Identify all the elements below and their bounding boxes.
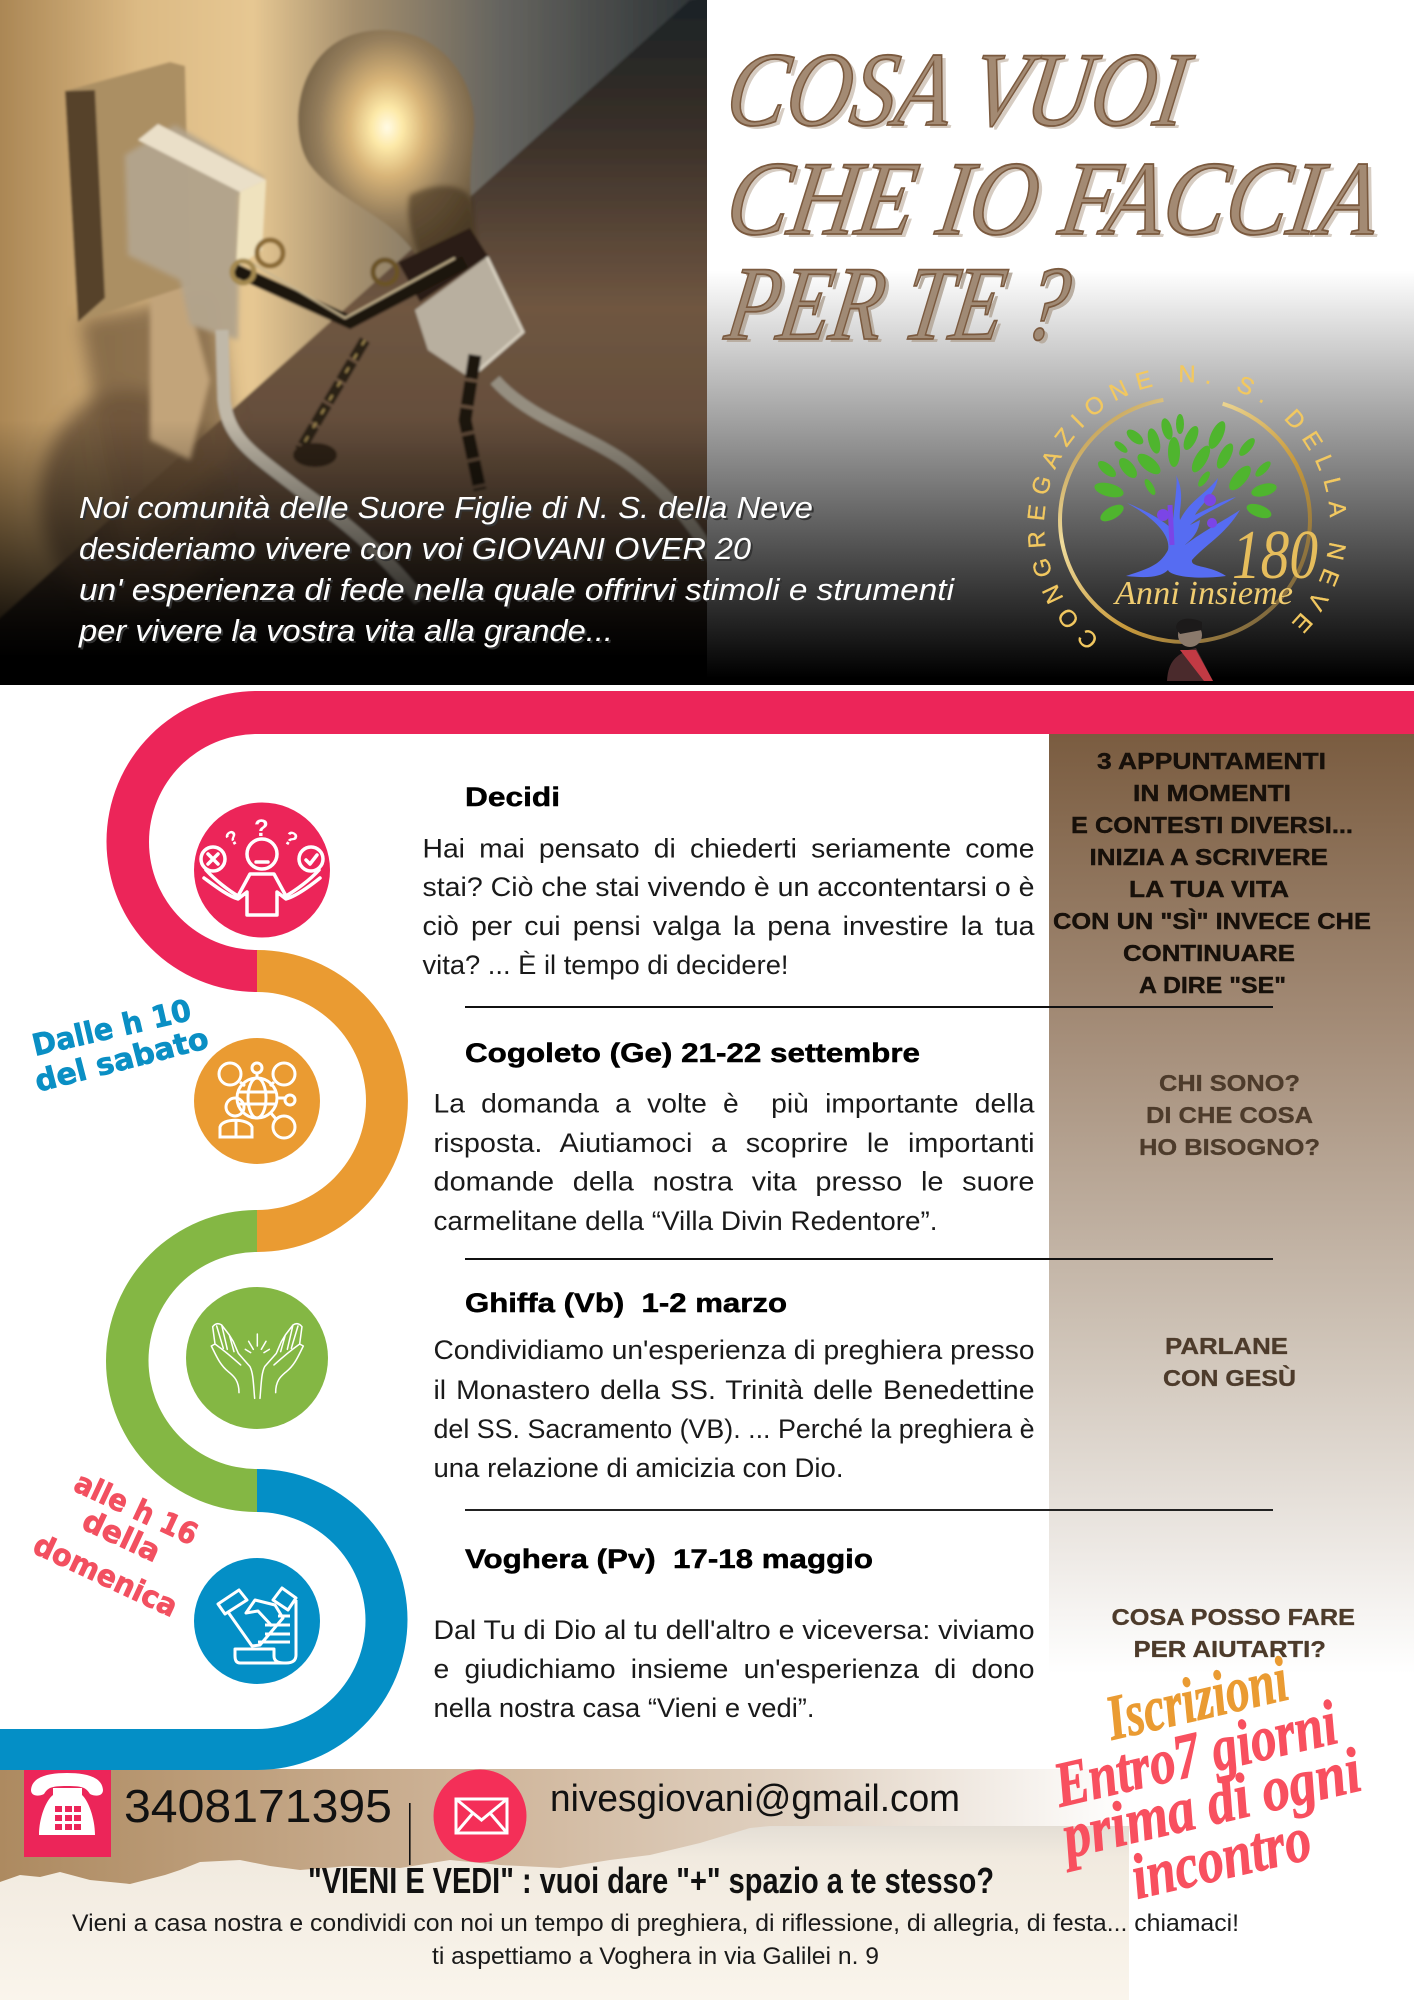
label: alle h 16 della domenica: domenica: [28, 1528, 183, 1625]
contact: email icon: [434, 1770, 526, 1862]
intro text: per vivere la vostra vita alla grande...: [78, 613, 613, 648]
column text: chi sono: [1139, 1070, 1320, 1160]
title: Cosa vuoi che io faccia per te: COSA VUOI: [719, 32, 1200, 149]
column text: cosa posso fare: PER AIUTARTI?: [1134, 1636, 1326, 1662]
intro text: Noi comunità delle Suore Figlie di N. S. della Neve: [79, 490, 813, 525]
body text: ghiffa: [434, 1335, 1034, 1483]
icon: praying hands: [186, 1287, 328, 1429]
column text: chi sono: HO BISOGNO?: [1139, 1134, 1320, 1160]
title: Cosa vuoi che io faccia per te: PER TE ?: [722, 249, 1082, 366]
title: Cosa vuoi che io faccia per te: [718, 32, 1393, 366]
callout: iscrizioni: [1046, 1643, 1368, 1913]
body text: cogoleto: [434, 1088, 1036, 1236]
body text: cogoleto: risposta. Aiutiamoci a scoprire le importanti: [434, 1128, 1034, 1158]
column callout: 3 appuntamenti: [1053, 748, 1371, 998]
body text: decidi: vita? ... È il tempo di decidere!: [422, 950, 788, 980]
logo tree: [1093, 414, 1278, 578]
column text: parlane con gesu: CON GESÙ: [1163, 1364, 1296, 1391]
torn paper background: [0, 1826, 1129, 2000]
bottom band gradient: [0, 1769, 1130, 1889]
column callout: 3 appuntamenti: CONTINUARE: [1123, 940, 1295, 966]
heading: vieni e vedi: "VIENI E VEDI" : vuoi dare "+" spazio a te stesso?: [308, 1860, 994, 1901]
intro text: un' esperienza di fede nella quale offrirvi stimoli e strumenti: [79, 572, 955, 607]
body text: voghera: [434, 1615, 1034, 1723]
title: Cosa vuoi che io faccia per te: PER TE ?: [718, 246, 1078, 363]
entro 7 giorni: Entro7 giorni: [1046, 1687, 1344, 1821]
column callout: 3 appuntamenti: A DIRE "SE": [1139, 972, 1286, 998]
label: dalle h 10 del sabato: del sabato: [31, 1021, 212, 1100]
logo anni insieme: Anni insieme: [1113, 575, 1293, 612]
intro text: per vivere la vostra vita alla grande...: [80, 615, 615, 650]
label: alle h 16 della domenica: [28, 1466, 203, 1625]
section: cogoleto: [434, 1038, 1036, 1236]
column callout: 3 appuntamenti: INIZIA A SCRIVERE: [1090, 844, 1328, 870]
footer invitation text: ti aspettiamo a Voghera in via Galilei n. 9: [432, 1943, 879, 1970]
serpentine orange segment: [257, 950, 408, 1252]
body text: decidi: stai? Ciò che stai vivendo è un accontentarsi o è: [422, 872, 1034, 902]
header right gradient panel: [707, 0, 1414, 685]
column callout: 3 appuntamenti: LA TUA VITA: [1129, 876, 1289, 902]
body text: decidi: [422, 834, 1036, 980]
column text: cosa posso fare: [1112, 1604, 1355, 1662]
column callout: 3 appuntamenti: E CONTESTI DIVERSI...: [1071, 812, 1353, 838]
body text: cogoleto: La domanda a volte è più importante della: [434, 1088, 1036, 1118]
logo founder portrait: [1167, 619, 1213, 681]
body text: voghera: Dal Tu di Dio al tu dell'altro e viceversa: viviamo: [434, 1615, 1034, 1645]
footer invitation text: Vieni a casa nostra e condividi con noi un tempo di preghiera, di riflessione, di allegria, di festa... chiamaci!: [72, 1910, 1239, 1937]
section: voghera: [434, 1544, 1034, 1723]
hero photo: light bulb robot plugging into socket: [0, 0, 720, 690]
heading: decidi: Decidi: [465, 782, 560, 812]
serpentine blue segment: [0, 1469, 408, 1770]
prima di ogni: prima di ogni: [1051, 1734, 1368, 1873]
logo: congregation 180 years: [1027, 365, 1346, 681]
body text: ghiffa: una relazione di amicizia con Dio.: [434, 1453, 844, 1483]
incontro: incontro: [1124, 1803, 1317, 1913]
iscrizioni word: Iscrizioni: [1098, 1643, 1295, 1754]
heading: cogoleto: Cogoleto (Ge) 21-22 settembre: [465, 1038, 920, 1068]
icon: person deciding: ?: [254, 815, 269, 842]
contact: phone icon: [24, 1770, 111, 1857]
divider 1: [465, 1006, 1273, 1008]
intro text: Noi comunità delle Suore Figlie di N. S. della Neve: [81, 492, 815, 527]
body text: ghiffa: il Monastero della SS. Trinità delle Benedettine: [434, 1375, 1034, 1405]
divider 3: [465, 1509, 1273, 1511]
body text: cogoleto: carmelitane della “Villa Divin Redentore”.: [434, 1206, 938, 1236]
right side gradient column: [1049, 734, 1414, 1674]
section: ghiffa: [434, 1288, 1034, 1483]
body text: decidi: Hai mai pensato di chiederti seriamente come: [422, 834, 1034, 864]
contact: email address: nivesgiovani@gmail.com: [550, 1778, 960, 1820]
contact divider: [409, 1803, 411, 1865]
label: alle h 16 della domenica: della: [77, 1504, 166, 1570]
label: alle h 16 della domenica: alle h 16: [69, 1466, 203, 1553]
intro text: desideriamo vivere con voi GIOVANI OVER 20: [79, 531, 751, 566]
column callout: 3 appuntamenti: IN MOMENTI: [1133, 780, 1291, 806]
icon: person deciding: ?: [280, 827, 301, 852]
icon: person deciding: ?: [222, 826, 243, 851]
contact: phone number: 3408171395: [124, 1780, 392, 1832]
logo circular text: CONGREGAZIONE N. S. DELLA NEVE: [1027, 365, 1346, 648]
intro text: desideriamo vivere con voi GIOVANI OVER 20: [81, 533, 753, 568]
divider 2: [465, 1258, 1273, 1260]
column text: parlane con gesu: [1163, 1333, 1296, 1391]
intro text: un' esperienza di fede nella quale offrirvi stimoli e strumenti: [81, 574, 957, 609]
heading: ghiffa: Ghiffa (Vb) 1-2 marzo: [465, 1288, 787, 1318]
body text: cogoleto: domande della nostra vita presso le suore: [434, 1166, 1034, 1196]
footer invitation text: [72, 1910, 1239, 1970]
icon: people network globe: [194, 1038, 320, 1164]
column callout: 3 appuntamenti: 3 APPUNTAMENTI: [1097, 748, 1326, 774]
body text: decidi: ciò per cui pensi valga la pena investire la tua: [422, 911, 1036, 941]
logo gold ring: [1060, 398, 1310, 642]
body text: ghiffa: Condividiamo un'esperienza di preghiera presso: [434, 1335, 1034, 1365]
column callout: 3 appuntamenti: CON UN "SÌ" INVECE CHE: [1053, 907, 1371, 934]
heading: voghera: Voghera (Pv) 17-18 maggio: [465, 1544, 873, 1574]
intro text: [78, 490, 957, 650]
serpentine pink segment: [106, 691, 1414, 992]
serpentine green segment: [106, 1210, 257, 1512]
column text: parlane con gesu: PARLANE: [1165, 1333, 1288, 1359]
column text: chi sono: DI CHE COSA: [1146, 1102, 1313, 1128]
icon: handshake agreement: [194, 1558, 320, 1684]
body text: ghiffa: del SS. Sacramento (VB). ... Perché la preghiera è: [434, 1414, 1034, 1444]
body text: voghera: e giudichiamo insieme un'esperienza di dono: [434, 1654, 1034, 1684]
section: decidi: [422, 782, 1036, 980]
icon: person deciding: [194, 802, 330, 938]
timeline serpentine: [0, 691, 1414, 1770]
column text: cosa posso fare: COSA POSSO FARE: [1112, 1604, 1355, 1630]
title: Cosa vuoi che io faccia per te: COSA VUOI: [723, 35, 1204, 152]
body text: voghera: nella nostra casa “Vieni e vedi”.: [434, 1693, 814, 1723]
label: dalle h 10 del sabato: Dalle h 10: [29, 993, 195, 1064]
column text: chi sono: CHI SONO?: [1159, 1070, 1300, 1096]
logo 180: 180: [1232, 517, 1318, 594]
